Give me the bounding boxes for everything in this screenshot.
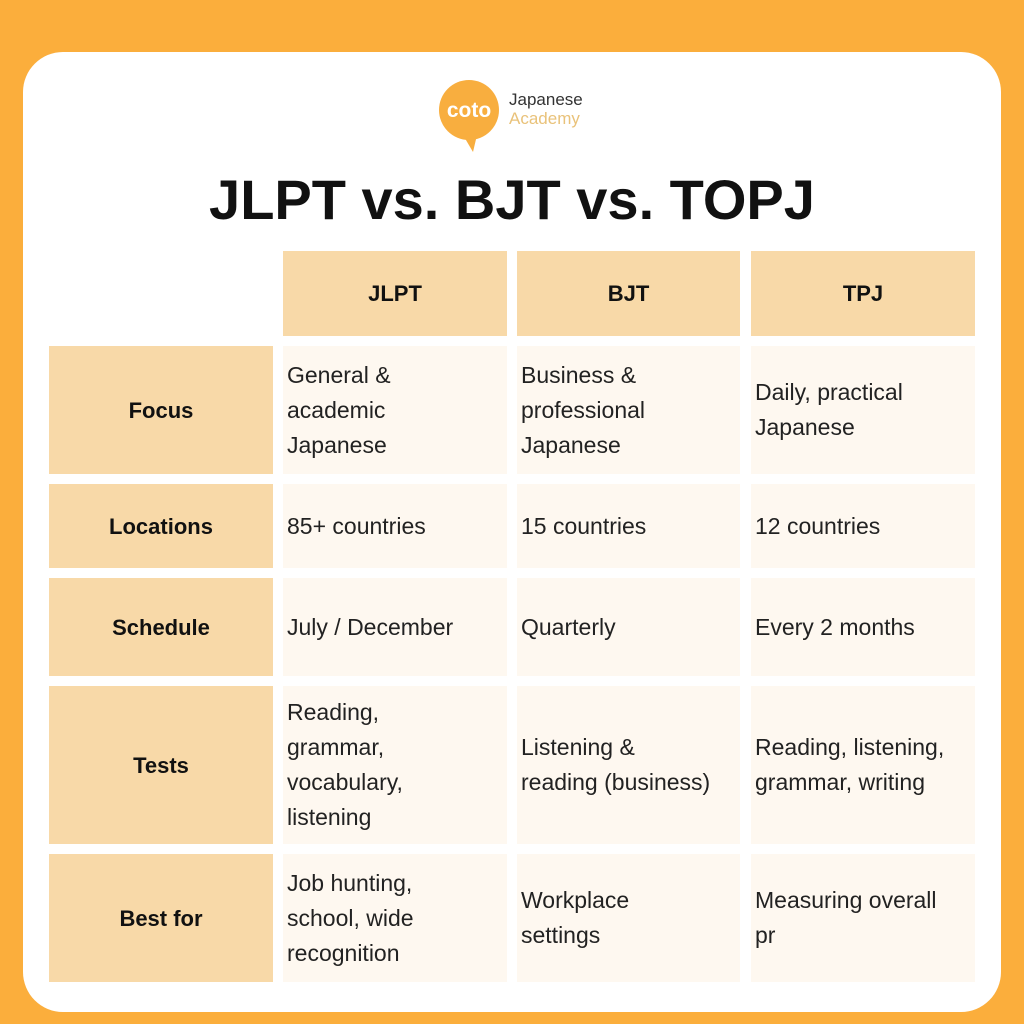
header: BJT: BJT [608,281,649,306]
logo text: Academy [509,109,580,128]
header: JLPT [283,251,507,336]
table: General & [287,362,391,388]
table: 15 countries [521,512,646,538]
table: settings [521,922,600,948]
logo text: Japanese [509,90,583,109]
table: Japanese [287,432,387,458]
row: Tests: Tests [133,752,189,778]
table: Measuring overall [755,887,937,913]
logo [439,80,583,152]
row: Schedule [49,578,273,676]
table: 85+ countries [287,512,426,538]
table: recognition [287,940,400,966]
table: professional [521,396,645,422]
table: Every 2 months [755,614,915,640]
table: school, wide [287,904,414,930]
table: grammar, writing [755,769,925,795]
row: Best for [49,854,273,982]
header: TPJ [751,251,975,336]
table: Japanese [521,432,621,458]
logo text [509,90,583,128]
row: Locations [49,484,273,568]
icon: speech bubble [439,80,499,152]
table: Daily, practical [755,379,903,405]
table: academic [287,396,385,422]
table: vocabulary, [287,769,403,795]
row: Best for: Best for [119,906,203,930]
table: Quarterly [521,614,616,640]
table: Reading, [287,699,379,725]
table: listening [287,804,371,830]
header: JLPT: JLPT [368,281,422,306]
row: Locations: Locations [109,514,213,538]
table: 12 countries [755,512,880,538]
row: Tests [49,686,273,844]
row: Schedule: Schedule [112,614,210,640]
header: BJT [517,251,740,336]
table: Listening & [521,734,635,760]
table: pr [755,922,775,948]
header: TPJ: TPJ [843,281,883,306]
table: reading (business) [521,769,710,795]
table: Reading, listening, [755,734,944,760]
table: Job hunting, [287,870,412,896]
table: Japanese [755,414,855,440]
table: Business & [521,362,636,388]
table: Workplace [521,887,629,913]
table: July / December [287,614,453,640]
icon: speech bubble: coto [447,99,491,122]
row: Focus: Focus [129,398,193,422]
table: grammar, [287,734,384,760]
title: JLPT vs. BJT vs. TOPJ [209,168,815,231]
row: Focus [49,346,273,474]
